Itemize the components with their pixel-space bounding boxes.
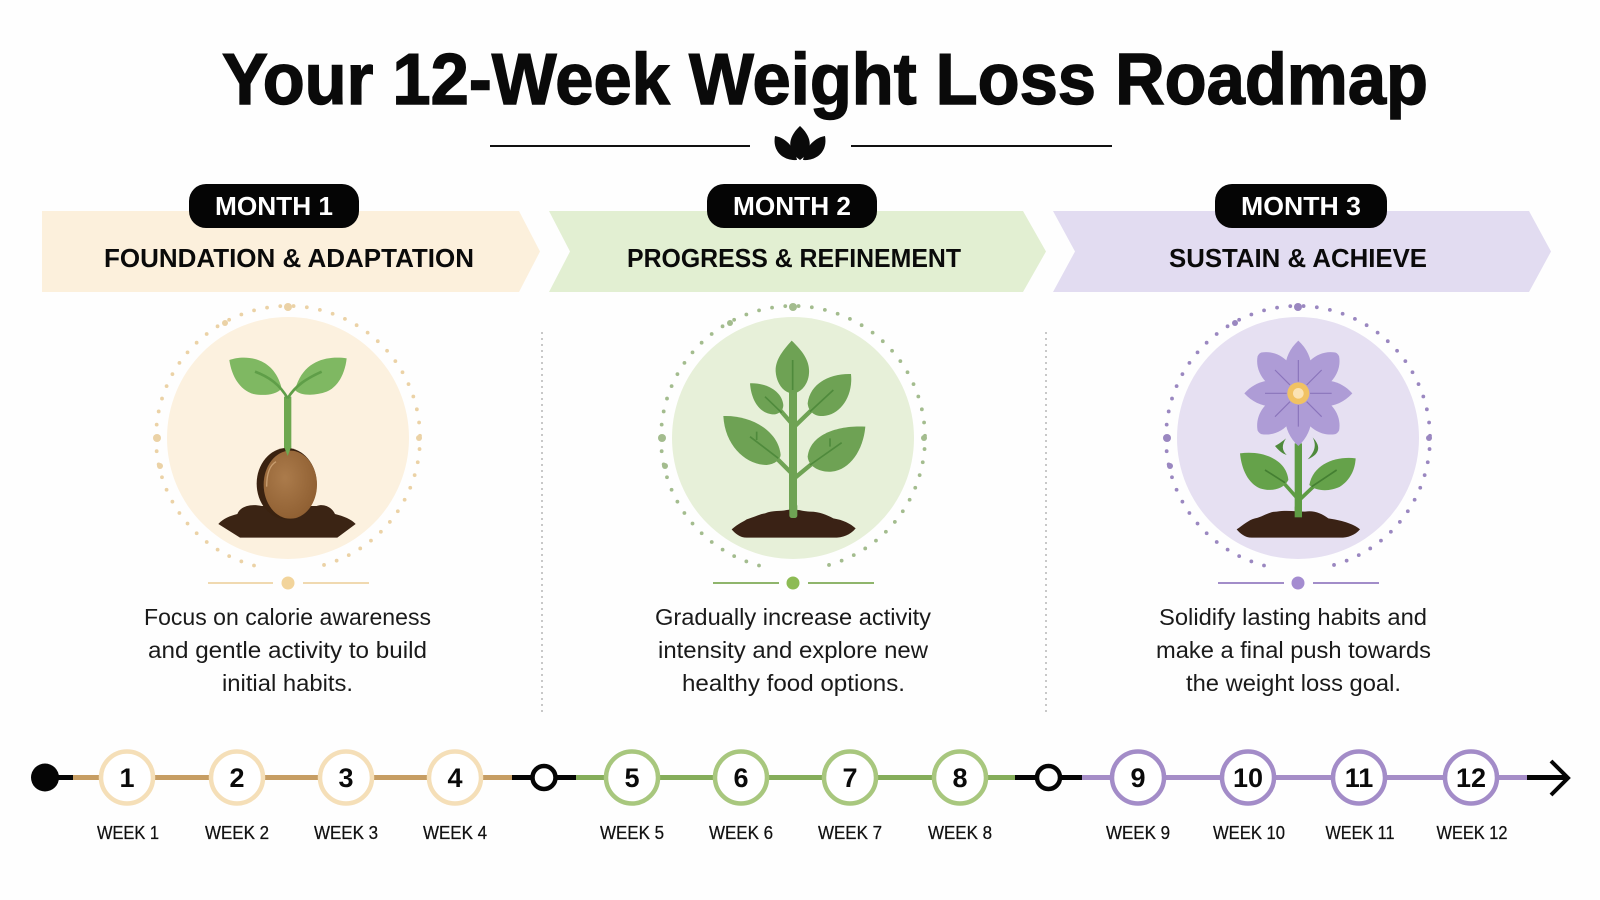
start marker <box>31 764 59 792</box>
accent divider <box>713 576 874 590</box>
weeks 5 to 8: 5 <box>624 763 640 793</box>
arrow <box>1551 761 1568 795</box>
title: Your 12-Week Weight Loss Roadmap <box>222 40 1428 120</box>
month 2 marker <box>532 766 556 789</box>
title divider with lotus <box>490 126 1112 160</box>
weeks 9 to 12: 11 <box>1345 763 1373 793</box>
description: intensity and explore new <box>658 637 928 663</box>
weeks 5 to 8: WEEK 6 <box>709 823 773 843</box>
weeks 9 to 12: 9 <box>1130 763 1146 793</box>
weeks 9 to 12: WEEK 12 <box>1436 823 1508 843</box>
weeks 5 to 8 <box>600 752 992 843</box>
month 2 pill <box>707 184 877 228</box>
description <box>1156 604 1431 696</box>
panel: month 2 <box>549 184 1046 696</box>
weeks 9 to 12 <box>1106 752 1508 843</box>
weeks 9 to 12: 10 <box>1233 763 1263 793</box>
illustration: leafy plant <box>658 303 927 566</box>
month 3 pill: MONTH 3 <box>1241 191 1361 221</box>
description <box>144 604 431 696</box>
weeks 1 to 4 <box>97 752 487 843</box>
weeks 5 to 8: WEEK 5 <box>600 823 664 843</box>
illustration: sprouting seed <box>153 303 422 566</box>
banner: foundation <box>42 211 540 292</box>
banner heading: PROGRESS & REFINEMENT <box>627 243 961 273</box>
weeks 1 to 4: WEEK 4 <box>423 823 487 843</box>
weeks 1 to 4: 1 <box>119 763 135 793</box>
panel: month 3 <box>1053 184 1551 696</box>
month 3 pill <box>1215 184 1387 228</box>
timeline <box>31 752 1568 843</box>
banner heading: SUSTAIN & ACHIEVE <box>1169 243 1427 273</box>
weeks 1 to 4: 2 <box>229 763 245 793</box>
description: make a final push towards <box>1156 637 1431 663</box>
weeks 9 to 12: WEEK 11 <box>1326 823 1394 843</box>
description: and gentle activity to build <box>148 637 427 663</box>
description: the weight loss goal. <box>1186 670 1401 696</box>
accent divider <box>1218 576 1379 590</box>
weeks 1 to 4: 4 <box>447 763 463 793</box>
description: Solidify lasting habits and <box>1159 604 1427 630</box>
weeks 5 to 8: 7 <box>842 763 858 793</box>
banner heading: FOUNDATION & ADAPTATION <box>104 243 474 273</box>
month 1 pill: MONTH 1 <box>215 191 333 221</box>
weeks 1 to 4: 3 <box>338 763 354 793</box>
weeks 9 to 12: 12 <box>1456 763 1486 793</box>
weeks 1 to 4: WEEK 1 <box>97 823 159 843</box>
banner: sustain <box>1053 211 1551 292</box>
weeks 5 to 8: WEEK 7 <box>818 823 882 843</box>
month 2 pill: MONTH 2 <box>733 191 851 221</box>
weeks 5 to 8: 6 <box>733 763 749 793</box>
weeks 9 to 12: WEEK 9 <box>1106 823 1170 843</box>
timeline track <box>45 775 1566 780</box>
illustration: flowering plant <box>1163 303 1432 566</box>
weeks 9 to 12: WEEK 10 <box>1213 823 1285 843</box>
accent divider <box>208 576 369 590</box>
banner: progress <box>549 211 1046 292</box>
description: Gradually increase activity <box>655 604 932 630</box>
month 1 pill <box>189 184 359 228</box>
description: Focus on calorie awareness <box>144 604 431 630</box>
icon: lotus <box>775 126 825 160</box>
weeks 5 to 8: 8 <box>952 763 968 793</box>
weeks 1 to 4: WEEK 3 <box>314 823 378 843</box>
weeks 1 to 4: WEEK 2 <box>205 823 269 843</box>
panel: month 1 <box>42 184 540 696</box>
description <box>655 604 932 696</box>
weeks 5 to 8: WEEK 8 <box>928 823 992 843</box>
description: initial habits. <box>222 670 353 696</box>
month 3 marker <box>1037 766 1060 789</box>
description: healthy food options. <box>682 670 905 696</box>
